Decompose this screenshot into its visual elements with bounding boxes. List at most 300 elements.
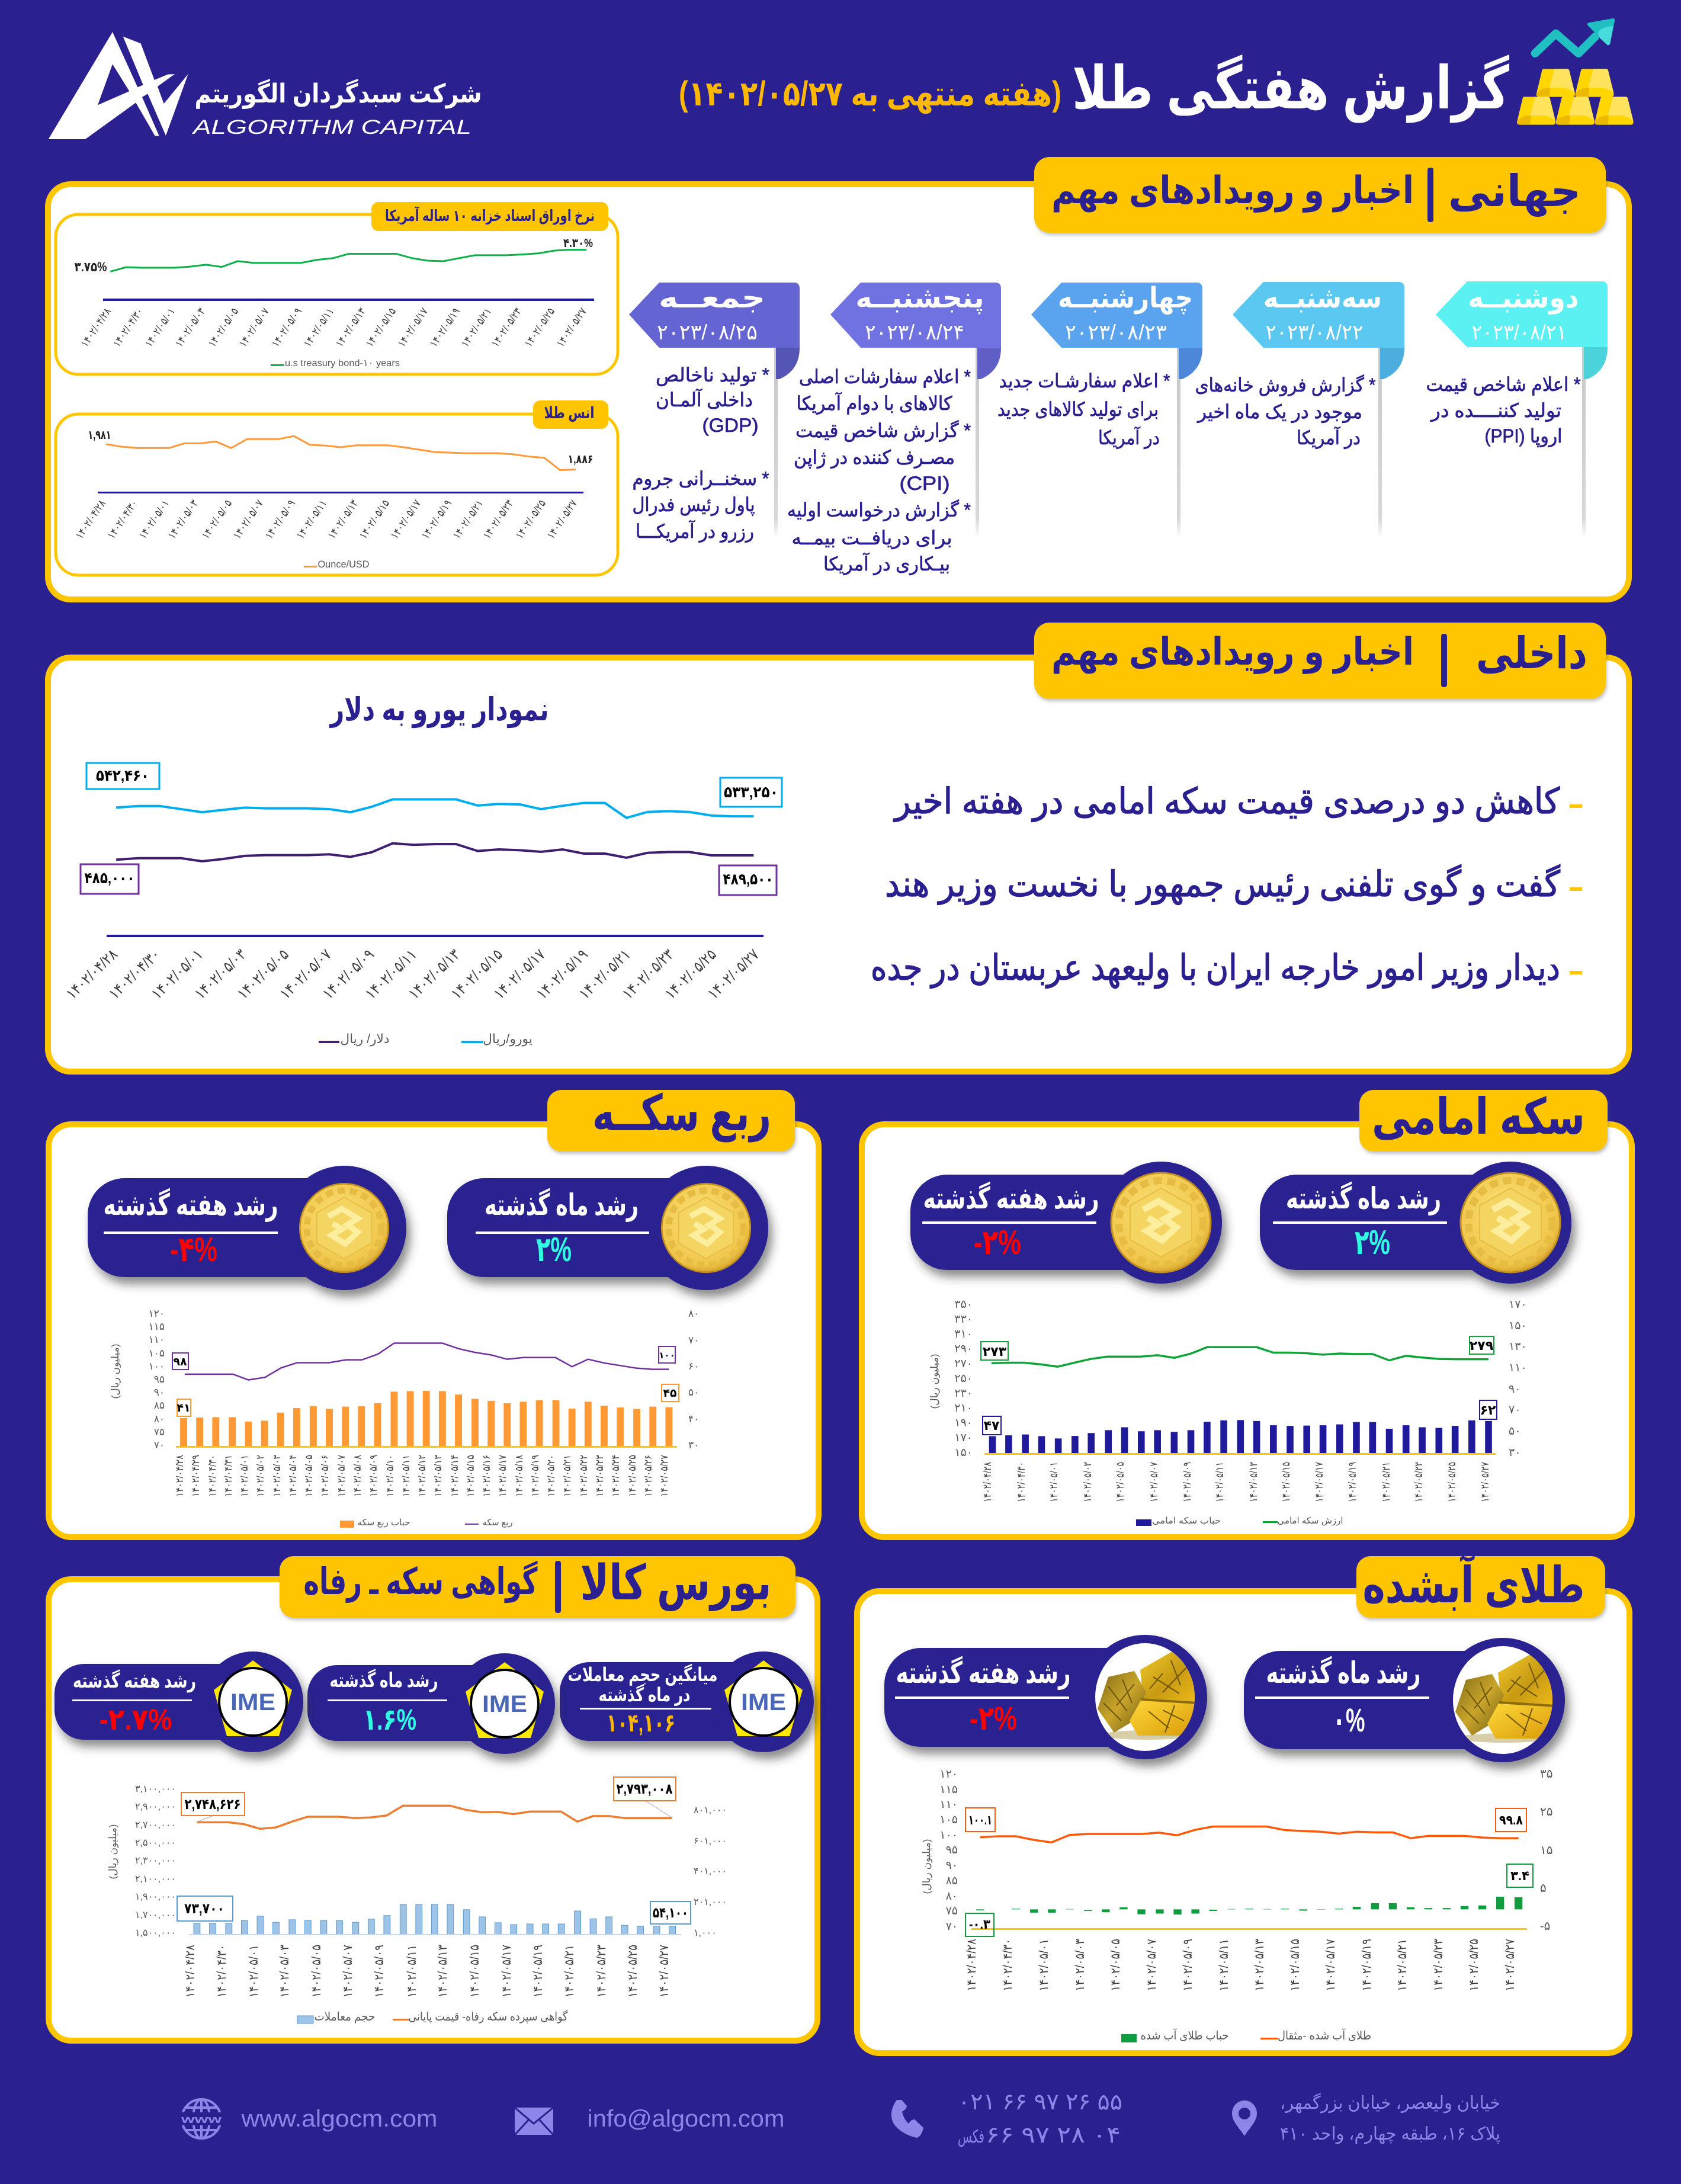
icon: IME logo — [466, 1662, 544, 1739]
left axis labels: ۷۵ — [946, 1905, 958, 1917]
date axis labels: ۱۴۰۲/۰۵/۰۱ — [137, 498, 172, 541]
date axis labels: ۱۴۰۲/۰۵/۱۵ — [1280, 1462, 1292, 1502]
left axis labels: ۱۱۰ — [939, 1798, 958, 1811]
icon: IME logo: IME — [230, 1689, 275, 1715]
date axis labels: ۱۴۰۲/۰۵/۱۷ — [498, 1455, 508, 1497]
date axis labels — [79, 306, 589, 349]
value: start: ۳.۷۵% — [75, 259, 107, 274]
date axis labels: ۱۴۰۲/۰۵/۰۷ — [1148, 1462, 1160, 1502]
text block: Thursday events: مصـرف کننده در ژاپن — [794, 447, 955, 469]
legend — [319, 1031, 532, 1046]
heading: domestic tab: اخبار و رویدادهای مهم — [1051, 630, 1414, 674]
panel: commodity exchange — [49, 1556, 817, 2041]
legend: حباب ربع سکه — [358, 1518, 410, 1528]
date axis labels: ۱۴۰۲/۰۵/۰۳ — [173, 306, 208, 349]
date axis labels: ۱۴۰۲/۰۴/۲۸ — [965, 1939, 979, 1991]
legend: دلار/ ریال — [340, 1031, 390, 1046]
title date: (هفته منتهی به ۱۴۰۲/۰۵/۲۷) — [679, 75, 1061, 114]
ribbon: Tuesday: ۲۰۲۳/۰۸/۲۲ — [1265, 320, 1364, 344]
panel: Emami coin — [862, 1089, 1632, 1537]
left axis labels: ۱۱۵ — [149, 1321, 165, 1332]
callout: price end: ۲,۷۹۳,۰۰۸ — [616, 1781, 673, 1797]
line: ounce price — [106, 436, 576, 470]
date axis labels: ۱۴۰۲/۰۴/۲۸ — [981, 1462, 993, 1502]
date axis labels — [981, 1462, 1491, 1502]
callout: euro start — [86, 763, 159, 789]
date axis labels: ۱۴۰۲/۰۴/۳۰ — [1001, 1939, 1015, 1991]
company name: شرکت سبدگردان الگوریتم — [194, 78, 482, 109]
address: پلاک ۱۶، طبقه چهارم، واحد ۴۱۰ — [1280, 2124, 1500, 2144]
date axis labels: ۱۴۰۲/۰۵/۰۹ — [319, 946, 377, 1003]
left axis labels: ۸۵ — [154, 1400, 165, 1411]
heading: commodity exchange: گواهی سکه ـ رفاه — [303, 1560, 538, 1603]
line: dollar — [116, 844, 753, 861]
ribbon: Wednesday — [1031, 283, 1202, 538]
left axis labels: ۹۵ — [946, 1844, 958, 1856]
footer contact bar — [179, 2090, 1500, 2148]
text block: Monday events: * اعلام شاخص قیمت — [1426, 374, 1580, 396]
text block: Friday events — [633, 364, 769, 543]
callout: value end — [1496, 1808, 1526, 1832]
text block: Monday events — [1426, 374, 1580, 447]
ribbon: Friday: جمعــه — [659, 283, 765, 314]
right axis labels: ۵۰ — [1509, 1425, 1520, 1438]
title — [679, 54, 1510, 123]
date axis labels: ۱۴۰۲/۰۵/۱۵ — [364, 306, 399, 349]
right axis labels: ۸۰۱,۰۰۰ — [694, 1805, 727, 1816]
left axis labels: ۱۵۰ — [954, 1447, 973, 1459]
date axis labels: ۱۴۰۲/۰۴/۲۸ — [184, 1945, 197, 1998]
line: gold value — [980, 1826, 1519, 1842]
right axis labels: ۶۰ — [688, 1361, 699, 1372]
callout: bubble start: ۴۱ — [177, 1402, 191, 1415]
left axis labels: ۹۰ — [154, 1387, 165, 1398]
heading: quarter coin — [547, 1085, 795, 1152]
text block: Thursday events: (CPI) — [899, 473, 950, 494]
date axis labels: ۱۴۰۲/۰۵/۰۱ — [1037, 1939, 1051, 1991]
right axis labels: ۶۰۱,۰۰۰ — [694, 1836, 727, 1846]
callout: value end — [659, 1346, 675, 1363]
icon: IME logo — [724, 1660, 803, 1737]
left axis labels — [149, 1308, 165, 1451]
date axis labels: ۱۴۰۲/۰۵/۱۷ — [389, 498, 424, 541]
bars: coin bubble — [989, 1420, 1492, 1454]
date axis labels: ۱۴۰۲/۰۵/۲۰ — [546, 1455, 557, 1497]
callout: bubble end — [662, 1384, 679, 1402]
chart title: نرخ اوراق اسناد خزانه ۱۰ ساله آمریکا — [385, 206, 595, 225]
panel: global news and events — [48, 157, 1629, 599]
date axis labels: ۱۴۰۲/۰۵/۱۵ — [466, 1455, 476, 1497]
icon: IME logo: IME — [482, 1691, 527, 1717]
date axis labels: ۱۴۰۲/۰۵/۲۵ — [662, 946, 720, 1003]
date axis labels: ۱۴۰۲/۰۵/۰۹ — [263, 498, 298, 541]
right axis labels: ۱۵ — [1540, 1844, 1552, 1857]
date axis labels: ۱۴۰۲/۰۵/۰۷ — [277, 946, 335, 1003]
date axis labels: ۱۴۰۲/۰۴/۲۹ — [191, 1455, 201, 1497]
date axis labels: ۱۴۰۲/۰۵/۱۱ — [362, 946, 420, 1003]
right axis labels — [1509, 1298, 1527, 1459]
date axis labels: ۱۴۰۲/۰۵/۱۱ — [1217, 1939, 1231, 1991]
left axis labels: ۲۵۰ — [954, 1372, 973, 1385]
callout: euro end — [720, 778, 782, 807]
badge: monthly growth: ۱.۶% — [363, 1703, 416, 1736]
date axis labels: ۱۴۰۲/۰۵/۰۵ — [206, 306, 241, 349]
icon: IME logo — [214, 1660, 292, 1737]
callout: bubble start: ۴۷ — [984, 1418, 1000, 1433]
badge: monthly growth: ۲% — [536, 1230, 572, 1269]
date axis labels: ۱۴۰۲/۰۵/۱۹ — [533, 946, 591, 1003]
date axis labels: ۱۴۰۲/۰۵/۰۴ — [288, 1455, 299, 1497]
badge: weekly growth: -۲% — [974, 1223, 1021, 1262]
date axis labels: ۱۴۰۲/۰۵/۱۰ — [385, 1455, 396, 1497]
right axis labels: ۷۰ — [1509, 1404, 1520, 1416]
date axis labels: ۱۴۰۲/۰۵/۱۴ — [450, 1455, 460, 1497]
chart: gold ounce — [56, 400, 618, 575]
date axis labels: ۱۴۰۲/۰۵/۱۱ — [301, 306, 336, 349]
date axis labels: ۱۴۰۲/۰۵/۰۷ — [231, 498, 266, 541]
right axis labels: ۱۳۰ — [1509, 1340, 1527, 1353]
date axis labels: ۱۴۰۲/۰۵/۲۱ — [563, 1945, 576, 1998]
left axis labels: ۹۵ — [154, 1374, 165, 1385]
callout: dollar end — [719, 865, 777, 895]
callout: dollar start — [81, 864, 139, 894]
badge: weekly growth: -۴% — [170, 1230, 217, 1269]
left axis labels: ۲۹۰ — [954, 1343, 973, 1355]
left axis labels — [954, 1298, 973, 1459]
left axis labels: ۳,۱۰۰,۰۰۰ — [135, 1784, 176, 1794]
line: euro — [116, 799, 753, 818]
ribbon: Monday: ۲۰۲۳/۰۸/۲۱ — [1471, 320, 1567, 344]
legend — [297, 2010, 568, 2024]
date axis labels: ۱۴۰۲/۰۵/۲۷ — [1503, 1939, 1517, 1991]
date axis labels: ۱۴۰۲/۰۵/۰۶ — [320, 1455, 331, 1497]
left axis labels: ۹۰ — [946, 1859, 958, 1872]
right axis labels: ۸۰ — [688, 1308, 699, 1319]
legend: ربع سکه — [482, 1518, 513, 1528]
date axis labels: ۱۴۰۲/۰۴/۳۰ — [1015, 1462, 1027, 1502]
date axis labels: ۱۴۰۲/۰۵/۰۳ — [278, 1945, 291, 1998]
text block: Friday events: (GDP) — [702, 415, 758, 436]
callout: value start: ۱۰۰.۱ — [968, 1813, 992, 1827]
value: end: ۱,۸۸۶ — [567, 453, 594, 466]
badge: monthly growth — [307, 1653, 555, 1754]
date axis labels: ۱۴۰۲/۰۵/۲۳ — [619, 946, 677, 1003]
callout: bubble start — [983, 1416, 1001, 1435]
text block: Friday events: پاول رئیس فدرال — [633, 494, 755, 516]
icon: gold bars — [1517, 69, 1634, 125]
date axis labels — [965, 1939, 1517, 1991]
date axis labels: ۱۴۰۲/۰۵/۱۱ — [405, 1945, 419, 1998]
text block: Tuesday events: موجود در یک ماه اخیر — [1196, 401, 1362, 423]
callout: bubble end — [1507, 1864, 1533, 1887]
date axis labels: ۱۴۰۲/۰۵/۱۱ — [1214, 1462, 1226, 1502]
value: start: ۱,۹۸۱ — [88, 429, 111, 442]
date axis labels: ۱۴۰۲/۰۵/۱۷ — [1313, 1462, 1325, 1502]
text block: domestic news list — [871, 781, 1582, 989]
date axis labels: ۱۴۰۲/۰۵/۲۷ — [704, 946, 762, 1003]
date axis labels: ۱۴۰۲/۰۵/۰۳ — [1073, 1939, 1087, 1991]
date axis labels: ۱۴۰۲/۰۵/۰۳ — [272, 1455, 283, 1497]
date axis labels: ۱۴۰۲/۰۵/۰۹ — [1181, 1462, 1193, 1502]
right axis labels: ۱۷۰ — [1509, 1298, 1527, 1311]
heading: Emami coin: سکه امامی — [1372, 1089, 1585, 1144]
date axis labels: ۱۴۰۲/۰۵/۱۶ — [482, 1455, 492, 1497]
date axis labels: ۱۴۰۲/۰۵/۲۱ — [451, 498, 486, 541]
left axis labels: ۲,۱۰۰,۰۰۰ — [135, 1874, 176, 1884]
address — [1280, 2093, 1500, 2144]
chart title — [533, 400, 608, 429]
legend — [1136, 1516, 1343, 1526]
callout: bubble end: ۳.۴ — [1510, 1868, 1529, 1883]
right axis labels — [1540, 1768, 1552, 1933]
axis title: (میلیون ریال) — [110, 1344, 121, 1399]
date axis labels: ۱۴۰۲/۰۴/۲۸ — [63, 946, 121, 1003]
callout: value end: ۹۹.۸ — [1499, 1813, 1523, 1827]
date axis labels: ۱۴۰۲/۰۵/۲۳ — [1413, 1462, 1425, 1502]
callout: price end — [614, 1777, 676, 1818]
text block: Thursday events: بیـکاری در آمریکا — [823, 552, 950, 575]
bars: gold bubble — [976, 1897, 1522, 1914]
date axis labels: ۱۴۰۲/۰۵/۰۷ — [341, 1945, 355, 1998]
left axis labels: ۲,۹۰۰,۰۰۰ — [135, 1802, 176, 1812]
right axis labels: ۴۰ — [688, 1413, 699, 1425]
icon: IME logo: IME — [741, 1689, 786, 1715]
text block: Friday events: * سخنــرانی جروم — [633, 468, 769, 490]
date axis labels: ۱۴۰۲/۰۵/۰۵ — [234, 946, 292, 1003]
date axis labels: ۱۴۰۲/۰۵/۱۳ — [433, 1455, 444, 1497]
date axis labels: ۱۴۰۲/۰۵/۰۱ — [1048, 1462, 1060, 1502]
legend: گواهی سپرده سکه رفاه- قیمت پایانی — [409, 2010, 568, 2024]
text block: Friday events: داخلی آلمـان — [656, 388, 753, 410]
left axis labels: ۳۵۰ — [954, 1298, 973, 1311]
phone numbers: ۰۲۱ ۶۶ ۹۷ ۲۶ ۵۵ — [958, 2090, 1122, 2115]
text block: Thursday events: * اعلام سفارشات اصلی — [799, 366, 971, 388]
panel: quarter coin — [49, 1085, 819, 1537]
badge: monthly growth — [1260, 1162, 1571, 1284]
left axis labels: ۱۰۵ — [149, 1348, 165, 1359]
date axis labels: ۱۴۰۲/۰۴/۳۱ — [223, 1455, 234, 1497]
left axis labels: ۲۷۰ — [954, 1358, 973, 1370]
bars: trading volume — [194, 1904, 675, 1935]
chart title: نمودار یورو به دلار — [329, 692, 548, 728]
line: coin value — [992, 1347, 1488, 1367]
heading: domestic tab: داخلی — [1476, 628, 1587, 678]
date axis labels: ۱۴۰۲/۰۵/۱۹ — [531, 1945, 545, 1998]
date axis labels: ۱۴۰۲/۰۵/۱۳ — [436, 1945, 450, 1998]
badge: weekly growth: -۲% — [970, 1699, 1017, 1737]
icon: globe — [179, 2099, 224, 2138]
address: خیابان ولیعصر، خیابان بزرگمهر، — [1280, 2093, 1500, 2114]
date axis labels: ۱۴۰۲/۰۵/۱۷ — [500, 1945, 514, 1998]
callout: bubble start — [965, 1913, 994, 1936]
date axis labels: ۱۴۰۲/۰۵/۲۱ — [562, 1455, 573, 1497]
text block: domestic news list: کاهش دو درصدی قیمت سکه امامی در هفته اخیر — [893, 781, 1560, 822]
left axis labels: ۱۰۵ — [939, 1814, 958, 1826]
date axis labels: ۱۴۰۲/۰۵/۱۱ — [401, 1455, 412, 1497]
date axis labels: ۱۴۰۲/۰۵/۰۱ — [148, 946, 206, 1003]
callout: value start: ۹۸ — [173, 1356, 187, 1368]
text block: Thursday events: کالاهای با دوام آمریکا — [796, 392, 952, 415]
date axis labels: ۱۴۰۲/۰۵/۲۵ — [522, 306, 557, 349]
date axis labels: ۱۴۰۲/۰۵/۰۷ — [336, 1455, 347, 1497]
left axis labels: ۱,۹۰۰,۰۰۰ — [135, 1892, 176, 1902]
right axis labels: -۵ — [1540, 1920, 1550, 1933]
date axis labels: ۱۴۰۲/۰۵/۰۸ — [352, 1455, 363, 1497]
icon: rising arrow — [1535, 18, 1615, 53]
text block: Wednesday events — [997, 370, 1170, 449]
heading: melted gold: طلای آبشده — [1362, 1554, 1585, 1613]
callout: dollar end: ۴۸۹,۵۰۰ — [723, 870, 774, 888]
text block: Tuesday events: در آمریکا — [1297, 426, 1361, 449]
heading: commodity exchange — [280, 1556, 795, 1618]
date axis labels: ۱۴۰۲/۰۵/۰۵ — [310, 1945, 323, 1998]
legend: حجم معاملات — [314, 2010, 376, 2023]
date axis labels — [73, 498, 580, 541]
axis title: (میلیون ریال) — [929, 1354, 940, 1409]
date axis labels: ۱۴۰۲/۰۵/۰۳ — [166, 498, 201, 541]
badge: weekly growth: رشد هفته گذشته — [896, 1656, 1071, 1690]
left axis labels: ۳۱۰ — [954, 1328, 973, 1340]
left axis labels: ۱۲۰ — [939, 1768, 958, 1781]
ribbon: Thursday: ۲۰۲۳/۰۸/۲۴ — [865, 320, 964, 344]
ribbon: Monday — [1436, 281, 1608, 538]
right axis labels: ۵ — [1540, 1882, 1547, 1895]
date axis labels: ۱۴۰۲/۰۴/۲۸ — [79, 306, 114, 349]
right axis labels: ۷۰ — [688, 1335, 699, 1346]
date axis labels: ۱۴۰۲/۰۵/۱۸ — [514, 1455, 525, 1497]
legend: حباب طلای آب شده — [1141, 2028, 1228, 2042]
callout: dollar start: ۴۸۵,۰۰۰ — [84, 869, 135, 887]
date axis labels: ۱۴۰۲/۰۵/۲۵ — [1467, 1939, 1481, 1991]
date axis labels: ۱۴۰۲/۰۵/۰۵ — [304, 1455, 315, 1497]
text block: Friday events: رزرو در آمریکـــا — [636, 519, 754, 543]
badge: monthly growth: ۲% — [1355, 1223, 1390, 1262]
left axis labels: ۱۰۰ — [149, 1361, 165, 1372]
date axis labels: ۱۴۰۲/۰۵/۱۳ — [326, 498, 361, 541]
text block: Monday events: اروپا (PPI) — [1484, 425, 1563, 447]
legend: حباب سکه امامی — [1152, 1516, 1221, 1526]
text block: Monday events: تولید کننــــده در — [1430, 400, 1561, 422]
heading: global tab: اخبار و رویدادهای مهم — [1051, 169, 1414, 213]
right axis labels: ۴۰۱,۰۰۰ — [694, 1866, 727, 1877]
callout: volume end — [650, 1901, 691, 1924]
text block: Tuesday events: * گزارش فروش خانه‌های — [1195, 374, 1375, 396]
callout: price start: ۲,۷۴۸,۶۲۶ — [185, 1797, 240, 1813]
left axis labels: ۲۱۰ — [954, 1402, 973, 1415]
left axis labels: ۸۰ — [154, 1413, 165, 1425]
date axis labels: ۱۴۰۲/۰۴/۳۰ — [111, 306, 146, 349]
left axis labels: ۳۳۰ — [954, 1313, 973, 1326]
right axis labels: ۱,۰۰۰ — [694, 1928, 717, 1938]
date axis labels: ۱۴۰۲/۰۵/۲۳ — [1432, 1939, 1445, 1991]
badge: weekly growth: رشد هفته گذشته — [103, 1188, 278, 1222]
weekly calendar ribbons — [629, 281, 1608, 538]
callout: euro start: ۵۴۲,۴۶۰ — [96, 767, 149, 784]
date axis labels: ۱۴۰۲/۰۵/۰۵ — [200, 498, 235, 541]
date axis labels: ۱۴۰۲/۰۵/۰۱ — [247, 1945, 261, 1998]
text block: domestic news list: دیدار وزیر امور خارجه ایران با ولیعهد عربستان در جده — [871, 948, 1560, 989]
left axis labels: ۱۰۰ — [939, 1829, 958, 1842]
right axis labels — [694, 1805, 727, 1938]
icon: phone — [891, 2100, 923, 2138]
ribbon: Friday — [629, 283, 800, 538]
date axis labels: ۱۴۰۲/۰۵/۰۹ — [373, 1945, 386, 1998]
chart: Emami coin value and bubble — [929, 1298, 1527, 1526]
text block: Thursday events — [787, 366, 971, 575]
date axis labels: ۱۴۰۲/۰۵/۲۱ — [576, 946, 634, 1003]
text block: Wednesday events: در آمریکا — [1098, 426, 1160, 449]
date axis labels: ۱۴۰۲/۰۵/۱۷ — [1324, 1939, 1337, 1991]
legend — [1121, 2028, 1371, 2042]
date axis labels: ۱۴۰۲/۰۵/۰۹ — [270, 306, 304, 349]
badge: weekly growth: رشد هفته گذشته — [73, 1669, 196, 1692]
badge: weekly growth — [54, 1651, 303, 1752]
badge: weekly growth: رشد هفته گذشته — [923, 1181, 1099, 1216]
website: www.algocm.com — [240, 2106, 437, 2132]
text block: Thursday events: * گزارش درخواست اولیه — [787, 499, 971, 521]
date axis labels: ۱۴۰۲/۰۴/۳۰ — [207, 1455, 218, 1497]
callout: euro end: ۵۳۳,۲۵۰ — [724, 783, 778, 801]
icon: globe: www — [180, 2114, 223, 2125]
date axis labels — [63, 946, 762, 1003]
title text: گزارش هفتگی طلا — [1072, 54, 1510, 123]
badge: monthly growth: رشد ماه گذشته — [1286, 1181, 1441, 1216]
date axis labels: ۱۴۰۲/۰۵/۱۳ — [1247, 1462, 1259, 1502]
date axis labels: ۱۴۰۲/۰۵/۰۳ — [191, 946, 249, 1003]
phone numbers: فکس — [958, 2127, 984, 2147]
date axis labels: ۱۴۰۲/۰۵/۰۷ — [237, 306, 272, 349]
legend: طلای آب شده -مثقال — [1278, 2028, 1371, 2042]
callout: volume start: ۷۳,۷۰۰ — [184, 1901, 224, 1917]
date axis labels: ۱۴۰۲/۰۵/۲۳ — [481, 498, 516, 541]
badge: monthly growth: رشد ماه گذشته — [329, 1669, 438, 1692]
date axis labels: ۱۴۰۲/۰۵/۰۱ — [239, 1455, 250, 1497]
date axis labels: ۱۴۰۲/۰۴/۳۰ — [215, 1945, 229, 1998]
date axis labels: ۱۴۰۲/۰۵/۱۹ — [1360, 1939, 1374, 1991]
right axis labels: ۳۰ — [1509, 1447, 1520, 1459]
badge: weekly growth: -۲.۷% — [100, 1703, 172, 1736]
date axis labels: ۱۴۰۲/۰۵/۱۵ — [448, 946, 506, 1003]
legend — [340, 1518, 513, 1528]
badge: average monthly volume — [560, 1651, 814, 1752]
date axis labels: ۱۴۰۲/۰۵/۰۵ — [1114, 1462, 1126, 1502]
legend: ارزش سکه امامی — [1277, 1516, 1343, 1526]
callout: value start: ۲۷۳ — [983, 1344, 1007, 1359]
badge: average monthly volume: در ماه گذشته — [598, 1683, 691, 1706]
date axis labels: ۱۴۰۲/۰۵/۲۷ — [1479, 1462, 1491, 1502]
date axis labels: ۱۴۰۲/۰۵/۱۷ — [490, 946, 548, 1003]
callout: value start — [965, 1808, 995, 1832]
ribbon: Friday: ۲۰۲۳/۰۸/۲۵ — [657, 320, 758, 344]
chart title: انس طلا — [544, 404, 595, 422]
date axis labels: ۱۴۰۲/۰۵/۰۷ — [1145, 1939, 1159, 1991]
company logo — [49, 32, 482, 139]
left axis labels: ۸۵ — [946, 1875, 958, 1887]
date axis labels: ۱۴۰۲/۰۵/۲۷ — [545, 498, 580, 541]
email: info@algocm.com — [588, 2106, 784, 2132]
date axis labels: ۱۴۰۲/۰۵/۱۷ — [396, 306, 431, 349]
date axis labels: ۱۴۰۲/۰۵/۲۳ — [595, 1945, 608, 1998]
axis title: (میلیون ریال) — [107, 1824, 118, 1879]
ribbon: Wednesday: چهارشنبــه — [1058, 283, 1193, 315]
callout: value end: ۱۰۰ — [659, 1351, 675, 1361]
date axis labels: ۱۴۰۲/۰۵/۲۱ — [459, 306, 494, 349]
date axis labels: ۱۴۰۲/۰۵/۰۵ — [1109, 1939, 1122, 1991]
left axis labels: ۱,۵۰۰,۰۰۰ — [135, 1928, 176, 1938]
left axis labels: ۷۰ — [154, 1439, 165, 1451]
legend: یورو/ریال — [483, 1031, 532, 1046]
date axis labels: ۱۴۰۲/۰۵/۲۱ — [1380, 1462, 1392, 1502]
